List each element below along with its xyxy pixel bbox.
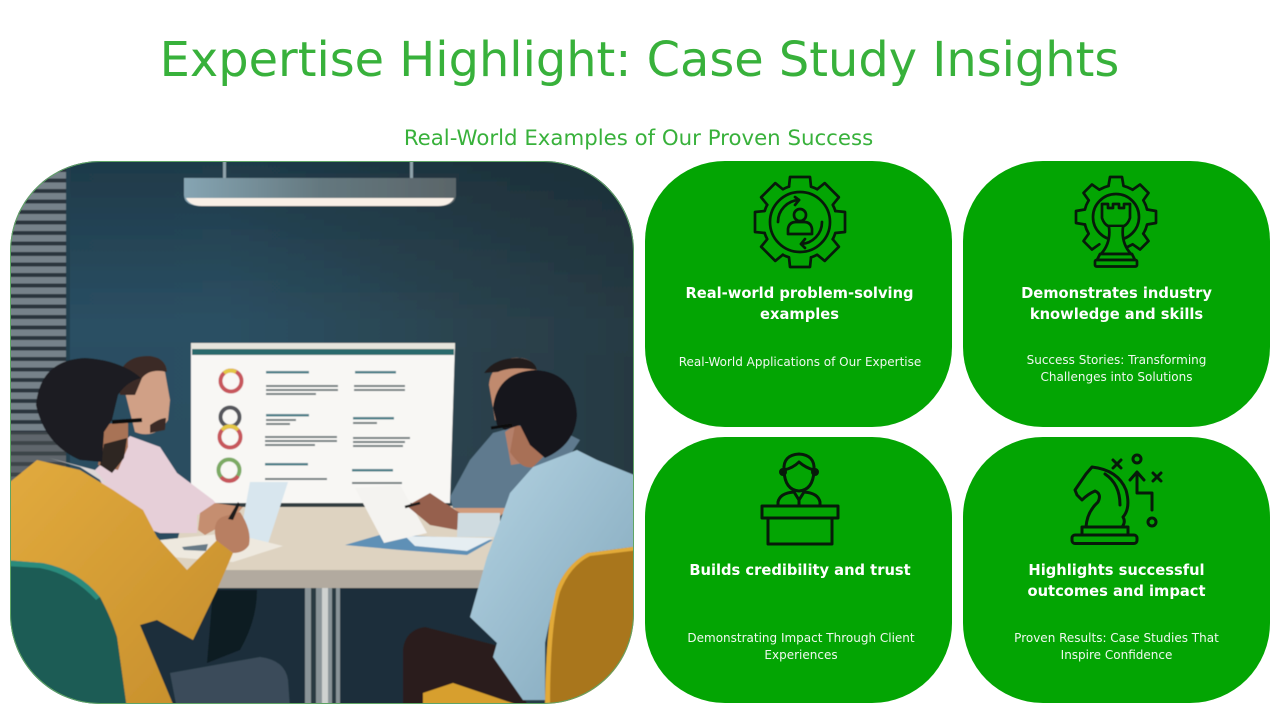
photo: team meeting around a table with a presentation screen bbox=[10, 161, 634, 704]
card heading: Demonstrates industry knowledge and skills bbox=[1021, 285, 1212, 323]
card: industry knowledge bbox=[963, 161, 1270, 427]
table bbox=[170, 503, 500, 704]
card description: Inspire Confidence bbox=[1061, 648, 1172, 662]
card heading bbox=[1028, 562, 1206, 600]
card heading: Highlights successful bbox=[1028, 562, 1205, 579]
card description bbox=[1014, 631, 1219, 662]
card heading: outcomes and impact bbox=[1028, 583, 1205, 600]
icon: gear with chess rook bbox=[1074, 176, 1158, 268]
icon: gear with person bbox=[754, 176, 846, 268]
chair seat and yellow chair back bbox=[423, 546, 639, 709]
icon: chess knight with strategy marks bbox=[1070, 454, 1163, 545]
wall bbox=[5, 156, 639, 709]
man at back right bbox=[450, 358, 580, 516]
card description: Challenges into Solutions bbox=[1040, 370, 1192, 384]
presentation screen bbox=[191, 343, 455, 503]
icon: speaker at podium bbox=[760, 452, 840, 546]
writing hand bbox=[405, 493, 500, 537]
trousers of man in yellow bbox=[170, 590, 290, 709]
photo frame bbox=[10, 162, 634, 704]
card: problem solving bbox=[645, 161, 952, 427]
notebook and folder bbox=[345, 502, 493, 556]
card: credibility bbox=[645, 437, 952, 703]
ceiling lamp bbox=[184, 161, 456, 206]
man in light blue shirt bbox=[470, 370, 639, 700]
card heading: Builds credibility and trust bbox=[689, 562, 911, 579]
card description: Proven Results: Case Studies That bbox=[1014, 631, 1219, 645]
card description: Demonstrating Impact Through Client Experiences bbox=[687, 631, 915, 662]
dark trousers bbox=[403, 627, 530, 709]
laptop bbox=[160, 482, 288, 562]
subtitle: Real-World Examples of Our Proven Success bbox=[404, 126, 873, 151]
card: outcomes bbox=[963, 437, 1270, 703]
man at back left in pink shirt bbox=[95, 356, 243, 535]
chair, green bbox=[5, 560, 127, 709]
card description: Success Stories: Transforming bbox=[1027, 353, 1206, 367]
title: Expertise Highlight: Case Study Insights bbox=[160, 33, 1119, 88]
under-table shadow bbox=[140, 588, 496, 703]
card description: Real-World Applications of Our Expertise bbox=[679, 355, 921, 369]
window blinds bbox=[5, 161, 70, 482]
card heading: Real-world problem-solving examples bbox=[685, 285, 914, 323]
man in yellow shirt bbox=[5, 358, 250, 709]
card description bbox=[1027, 353, 1206, 384]
